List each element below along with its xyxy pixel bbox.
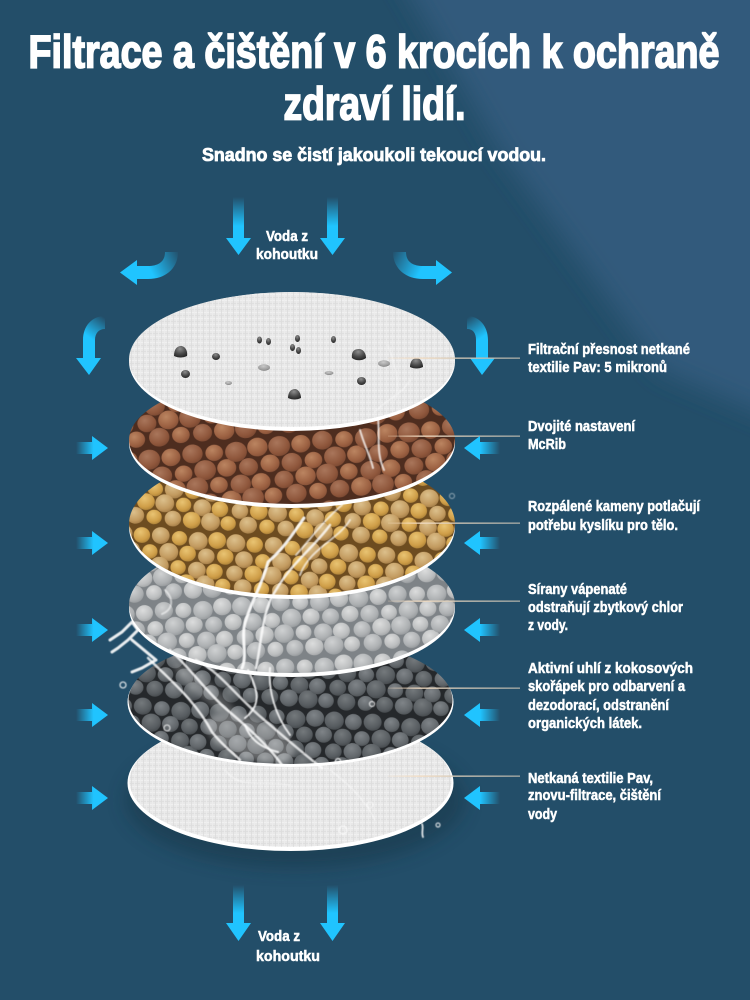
layer 6: non-woven fabric bbox=[128, 715, 454, 851]
layer 1: fabric with dirt bbox=[129, 292, 455, 431]
input label bbox=[256, 229, 318, 263]
label: filter precision bbox=[528, 342, 690, 376]
input label: kohoutku bbox=[256, 247, 318, 263]
output label: Voda z bbox=[258, 929, 300, 945]
arrow: curved down right bbox=[467, 316, 495, 375]
label: calcium sulfite: odstraňují zbytkový chlor bbox=[528, 600, 683, 616]
layer 2: brown ceramic balls bbox=[129, 376, 455, 508]
arrow: bottom right down bbox=[320, 885, 345, 941]
arrow: curved down left bbox=[76, 316, 105, 375]
arrow: bottom left down bbox=[226, 885, 251, 941]
side arrows: right bbox=[464, 436, 500, 810]
arrow: curved left bbox=[120, 252, 178, 285]
layer 4: calcium sulfite bbox=[129, 537, 455, 677]
layer 5: activated carbon bbox=[128, 636, 454, 767]
shadow under stack bbox=[125, 732, 465, 868]
title bbox=[28, 26, 720, 130]
input label: Voda z bbox=[266, 229, 308, 245]
arrow: top left down bbox=[226, 197, 251, 255]
label: activated carbon: organických látek. bbox=[528, 716, 642, 732]
label: hot stones bbox=[528, 499, 701, 534]
label: hot stones: potřebu kyslíku pro tělo. bbox=[528, 518, 678, 534]
title: zdraví lidí. bbox=[284, 78, 466, 130]
label: calcium sulfite: z vody. bbox=[528, 618, 568, 634]
label: activated carbon bbox=[528, 661, 693, 732]
label: non-woven re-filtration bbox=[528, 771, 662, 823]
label: non-woven re-filtration: Netkaná textilie Pav, bbox=[528, 771, 653, 787]
label: McRib: McRib bbox=[528, 437, 566, 453]
label: McRib bbox=[528, 419, 636, 453]
layer 3: yellow stones bbox=[129, 453, 455, 599]
output label: kohoutku bbox=[256, 949, 320, 965]
arrow: curved right bbox=[393, 252, 452, 285]
label: activated carbon: skořápek pro odbarvení a bbox=[528, 679, 686, 695]
water splash bbox=[110, 345, 454, 837]
label: filter precision: Filtrační přesnost netkané bbox=[528, 342, 690, 358]
label: non-woven re-filtration: vody bbox=[528, 807, 557, 823]
label: non-woven re-filtration: znovu-filtrace, čištění bbox=[528, 788, 662, 804]
label: activated carbon: Aktivní uhlí z kokosových bbox=[528, 661, 693, 677]
label: calcium sulfite bbox=[528, 582, 683, 634]
side arrows: left bbox=[76, 436, 108, 810]
label: hot stones: Rozpálené kameny potlačují bbox=[528, 499, 701, 515]
subtitle: Snadno se čistí jakoukoli tekoucí vodou. bbox=[202, 144, 546, 165]
leader lines bbox=[388, 358, 520, 777]
label: filter precision: textilie Pav: 5 mikronů bbox=[528, 360, 667, 376]
output label bbox=[256, 929, 320, 965]
dirt particles bbox=[174, 335, 423, 400]
label: calcium sulfite: Sírany vápenaté bbox=[528, 582, 627, 598]
label: McRib: Dvojité nastavení bbox=[528, 419, 636, 435]
label: activated carbon: dezodorací, odstranění bbox=[528, 698, 670, 714]
arrow: top right down bbox=[320, 197, 345, 255]
